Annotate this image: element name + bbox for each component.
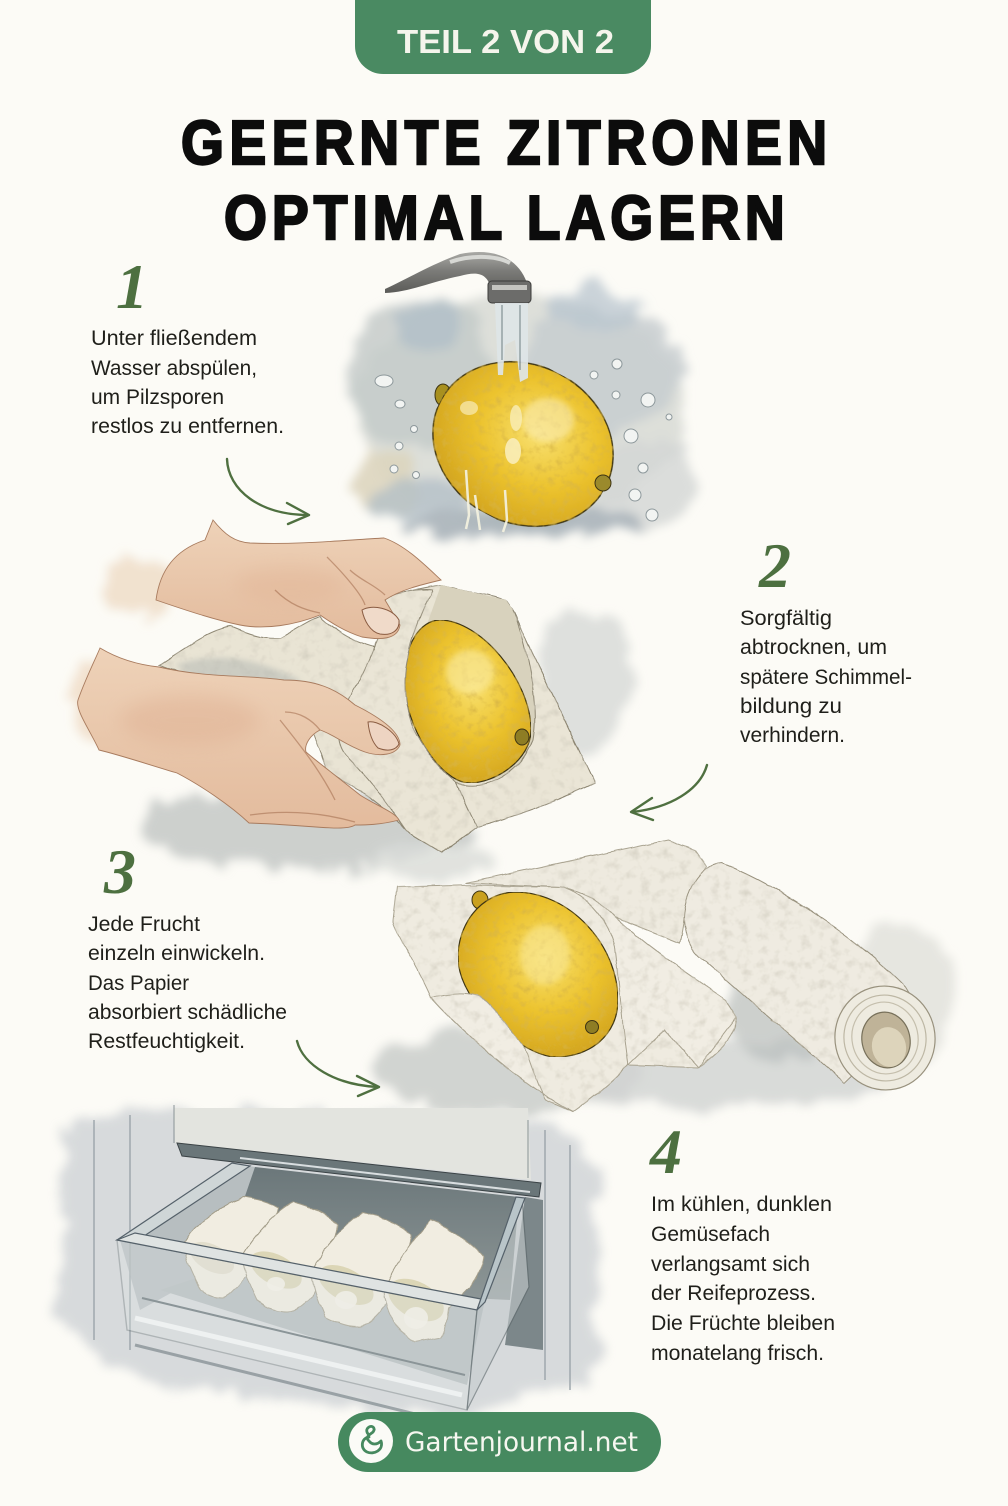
badge: part 2 of 2 <box>355 0 651 74</box>
back paper roll <box>466 840 707 943</box>
illustration 4: wrapped lemons in fridge drawer <box>62 1105 598 1425</box>
step 4: Gemüsefach <box>651 1222 770 1246</box>
watercolor shadow <box>375 925 955 1112</box>
upper hand <box>156 520 441 639</box>
drawer back wall <box>230 1167 519 1300</box>
step 4: Die Früchte bleiben <box>651 1311 835 1335</box>
step 3: Jede Frucht <box>88 912 200 936</box>
arrow 1 to 2 <box>227 459 309 524</box>
water stream <box>466 303 528 532</box>
step 2: Sorgfältig <box>740 606 832 630</box>
faucet <box>385 252 531 303</box>
lemon hints through paper <box>185 1235 451 1330</box>
step 4: 4 <box>649 1116 682 1187</box>
step 2: abtrocknen, um <box>740 635 887 659</box>
step 2: verhindern. <box>740 723 845 747</box>
step 4: monatelang frisch. <box>651 1341 824 1365</box>
footer brand pill <box>338 1412 661 1472</box>
lemon 3 <box>458 891 618 1057</box>
footer brand pill: Gartenjournal.net <box>405 1427 638 1458</box>
lower hand <box>78 648 400 828</box>
lemon 1 <box>404 331 642 557</box>
illustration 1: lemon rinsed under tap <box>345 252 690 557</box>
step 3 <box>88 836 287 1053</box>
fridge interior wash <box>62 1105 598 1425</box>
watercolor shadow <box>68 557 630 878</box>
watercolor water splash <box>345 288 690 536</box>
step 1: restlos zu entfernen. <box>91 414 284 438</box>
step 3: absorbiert schädliche <box>88 1000 287 1024</box>
step 2: spätere Schimmel- <box>740 665 912 689</box>
water droplets <box>375 359 672 521</box>
towel back <box>159 585 595 853</box>
towel front folds <box>339 589 595 853</box>
step 1: 1 <box>116 251 148 322</box>
drawer side walls <box>120 1163 255 1310</box>
step 4: Im kühlen, dunklen <box>651 1192 832 1216</box>
step 3: einzeln einwickeln. <box>88 941 265 965</box>
step 4 <box>649 1116 835 1365</box>
step 1: um Pilzsporen <box>91 385 224 409</box>
step 4: verlangsamt sich <box>651 1252 810 1276</box>
title: GEERNTE ZITRONEN <box>181 109 827 178</box>
drawer rail <box>177 1143 541 1197</box>
paper sheet <box>393 885 737 1112</box>
step 1 <box>91 251 284 438</box>
towel inner side <box>410 585 545 783</box>
badge: part 2 of 2: TEIL 2 VON 2 <box>397 23 614 60</box>
front paper roll <box>684 863 945 1099</box>
arrow 3 to 4 <box>297 1041 379 1096</box>
arrow 2 to 3 <box>631 765 707 820</box>
step 2: 2 <box>758 530 791 601</box>
step 3: Das Papier <box>88 971 189 995</box>
illustration 3: lemon wrapped in kitchen paper and roll <box>375 840 955 1112</box>
lemon 2 <box>404 620 531 783</box>
step 1: Wasser abspülen, <box>91 356 257 380</box>
step 2 <box>740 530 912 747</box>
step 2: bildung zu <box>740 694 842 718</box>
step 4: der Reifeprozess. <box>651 1281 816 1305</box>
step 3: Restfeuchtigkeit. <box>88 1029 245 1053</box>
step 3: 3 <box>103 836 136 907</box>
wrapped rolls <box>184 1197 484 1342</box>
drawer floor <box>160 1260 485 1385</box>
title: OPTIMAL LAGERN <box>224 184 785 253</box>
towel shading <box>175 658 300 695</box>
paper flaps <box>431 887 737 1112</box>
title <box>181 109 827 253</box>
icon: garden logo <box>349 1419 393 1463</box>
step 1: Unter fließendem <box>91 326 257 350</box>
glass drawer <box>117 1163 529 1410</box>
illustration 2: hands drying lemon with towel <box>68 520 630 878</box>
